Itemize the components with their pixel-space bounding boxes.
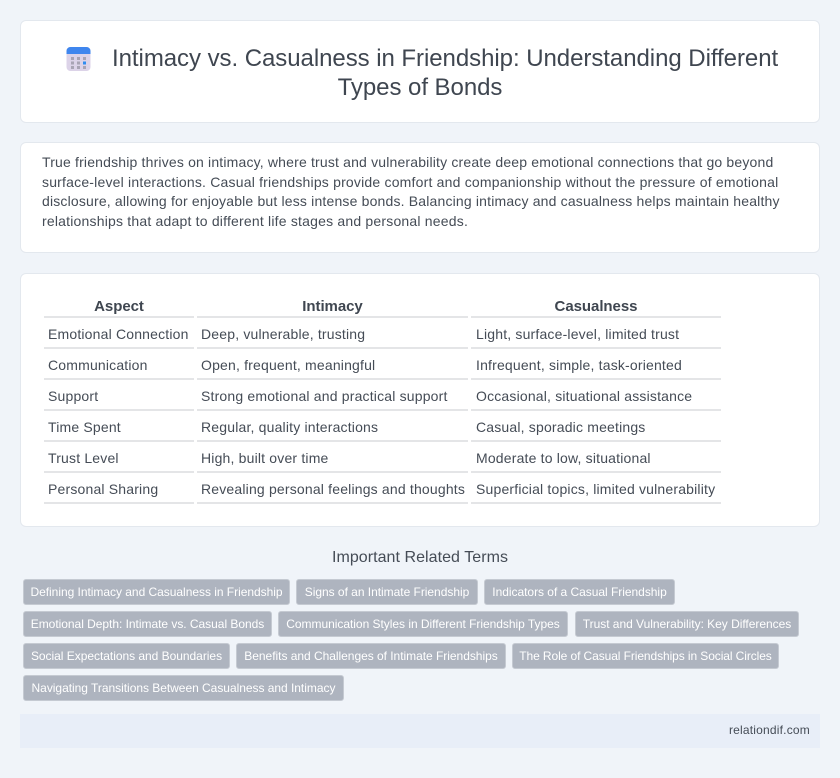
comparison table panel bbox=[20, 273, 820, 527]
related term tags: Trust and Vulnerability: Key Differences bbox=[583, 617, 791, 631]
intro text bbox=[42, 154, 780, 229]
intro text: True friendship thrives on intimacy, where trust and vulnerability create deep emotional connections that go beyond bbox=[42, 154, 773, 170]
related term tags bbox=[23, 579, 799, 701]
intro text: disclosure, allowing for enjoyable but less intense bonds. Balancing intimacy and casualness helps maintain healthy bbox=[42, 193, 780, 209]
comparison table: Time Spent bbox=[48, 419, 121, 435]
comparison table: Emotional Connection bbox=[48, 326, 189, 342]
footer bar bbox=[20, 714, 820, 748]
intro text: surface-level interactions. Casual friendships provide comfort and companionship without the pressure of emotional bbox=[42, 174, 778, 190]
comparison table: Open, frequent, meaningful bbox=[201, 357, 375, 373]
comparison table: Deep, vulnerable, trusting bbox=[201, 326, 365, 342]
comparison table: Trust Level bbox=[48, 450, 119, 466]
comparison table: Casualness bbox=[555, 298, 637, 315]
related term tags: Communication Styles in Different Friendship Types bbox=[286, 617, 560, 631]
related term tags: Social Expectations and Boundaries bbox=[31, 649, 222, 663]
footer site name: relationdif.com bbox=[729, 723, 810, 737]
comparison table bbox=[44, 298, 721, 504]
comparison table: Strong emotional and practical support bbox=[201, 388, 448, 404]
intro text: relationships that adapt to different life stages and personal needs. bbox=[42, 213, 468, 229]
comparison table: Intimacy bbox=[302, 298, 363, 315]
related term tags: Emotional Depth: Intimate vs. Casual Bonds bbox=[31, 617, 264, 631]
comparison table: Light, surface-level, limited trust bbox=[476, 326, 679, 342]
related term tags: The Role of Casual Friendships in Social Circles bbox=[519, 649, 772, 663]
icon: calendar bbox=[66, 47, 90, 71]
comparison table: Personal Sharing bbox=[48, 481, 158, 497]
comparison table: Superficial topics, limited vulnerability bbox=[476, 481, 715, 497]
comparison table: Occasional, situational assistance bbox=[476, 388, 692, 404]
comparison table: Aspect bbox=[94, 298, 144, 315]
title bbox=[112, 45, 778, 101]
header panel bbox=[20, 20, 820, 123]
related term tags: Indicators of a Casual Friendship bbox=[492, 585, 667, 599]
related term tags: Signs of an Intimate Friendship bbox=[305, 585, 469, 599]
comparison table: Moderate to low, situational bbox=[476, 450, 651, 466]
comparison table: High, built over time bbox=[201, 450, 328, 466]
comparison table: Casual, sporadic meetings bbox=[476, 419, 645, 435]
related term tags: Defining Intimacy and Casualness in Friendship bbox=[30, 585, 283, 599]
comparison table: Regular, quality interactions bbox=[201, 419, 378, 435]
related term tags: Navigating Transitions Between Casualness and Intimacy bbox=[32, 681, 335, 695]
related terms heading: Important Related Terms bbox=[332, 549, 508, 566]
comparison table: Revealing personal feelings and thoughts bbox=[201, 481, 465, 497]
related term tags: Benefits and Challenges of Intimate Friendships bbox=[244, 649, 498, 663]
comparison table: Support bbox=[48, 388, 98, 404]
title: Types of Bonds bbox=[338, 74, 502, 101]
comparison table: Infrequent, simple, task-oriented bbox=[476, 357, 682, 373]
comparison table: Communication bbox=[48, 357, 148, 373]
title: Intimacy vs. Casualness in Friendship: Understanding Different bbox=[112, 45, 778, 72]
intro paragraph panel bbox=[20, 142, 820, 253]
